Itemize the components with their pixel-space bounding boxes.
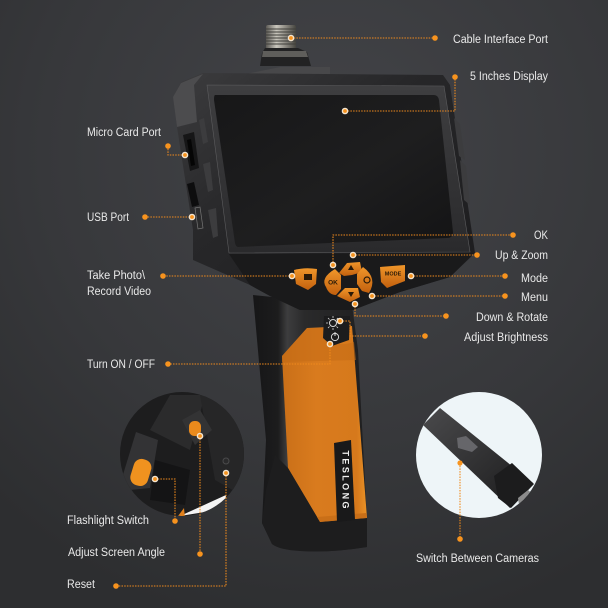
callout: up and zoom xyxy=(350,252,480,258)
label: turn on off: Turn ON / OFF xyxy=(87,359,155,371)
callout: down and rotate xyxy=(352,301,449,319)
orange flashlight switch xyxy=(128,457,153,488)
label: 5 inches display: 5 Inches Display xyxy=(470,71,548,83)
callout: switch between cameras xyxy=(457,460,463,542)
reset hole xyxy=(223,458,229,464)
screen xyxy=(214,95,453,247)
label: take photo record video: Take Photo\ xyxy=(87,270,146,282)
label: switch between cameras: Switch Between Cameras xyxy=(416,553,539,565)
button: mode xyxy=(380,265,405,288)
label: flashlight switch: Flashlight Switch xyxy=(67,515,149,527)
label: adjust brightness: Adjust Brightness xyxy=(464,332,548,344)
device: inspection camera xyxy=(173,25,475,552)
inset: camera probe xyxy=(416,392,542,518)
button: down xyxy=(337,288,360,302)
label: cable interface port: Cable Interface Port xyxy=(453,34,549,46)
callout: 5 inches display xyxy=(342,74,458,114)
label: down and rotate: Down & Rotate xyxy=(476,312,548,324)
callout: OK xyxy=(330,232,516,268)
callout: adjust brightness xyxy=(337,318,428,339)
power and brightness switch xyxy=(323,316,350,346)
label: mode: Mode xyxy=(521,273,548,285)
label: adjust screen angle: Adjust Screen Angle xyxy=(68,547,165,559)
callout: menu xyxy=(369,293,508,299)
button: photo xyxy=(294,268,317,290)
callout: usb port xyxy=(142,214,195,220)
label: menu: Menu xyxy=(521,292,548,304)
orange screen angle button xyxy=(189,421,201,436)
handle xyxy=(253,295,367,552)
top left chamfer highlight xyxy=(173,74,203,127)
label: take photo record video: Record Video xyxy=(87,286,151,298)
label: usb port: USB Port xyxy=(87,212,130,224)
label: micro card port: Micro Card Port xyxy=(87,127,162,139)
label: reset: Reset xyxy=(67,579,96,591)
button: up xyxy=(339,262,362,276)
label: OK: OK xyxy=(534,230,548,242)
screen frame xyxy=(173,73,475,310)
logo plate: TESLONG xyxy=(334,440,355,522)
bezel highlight xyxy=(207,85,470,253)
callout: reset xyxy=(113,470,229,589)
callout: take photo xyxy=(160,273,295,279)
button: OK xyxy=(324,269,341,295)
label: up and zoom: Up & Zoom xyxy=(495,250,548,262)
button: menu xyxy=(357,267,372,293)
callout: cable interface port xyxy=(288,35,438,41)
callout: adjust screen angle xyxy=(197,433,203,557)
cable connector xyxy=(246,25,330,74)
inset: flashlight and reset detail xyxy=(120,392,244,516)
label: take photo record video xyxy=(87,270,151,298)
button panel xyxy=(229,253,474,310)
button: mode: MODE xyxy=(385,271,402,277)
callout: mode xyxy=(408,273,508,279)
callout: micro card port xyxy=(165,143,188,158)
callout: turn on off xyxy=(165,341,333,367)
side ports xyxy=(183,118,470,238)
button: OK: OK xyxy=(328,280,338,287)
callout: flashlight switch xyxy=(152,476,178,524)
logo plate: TESLONG: TESLONG xyxy=(341,450,351,508)
